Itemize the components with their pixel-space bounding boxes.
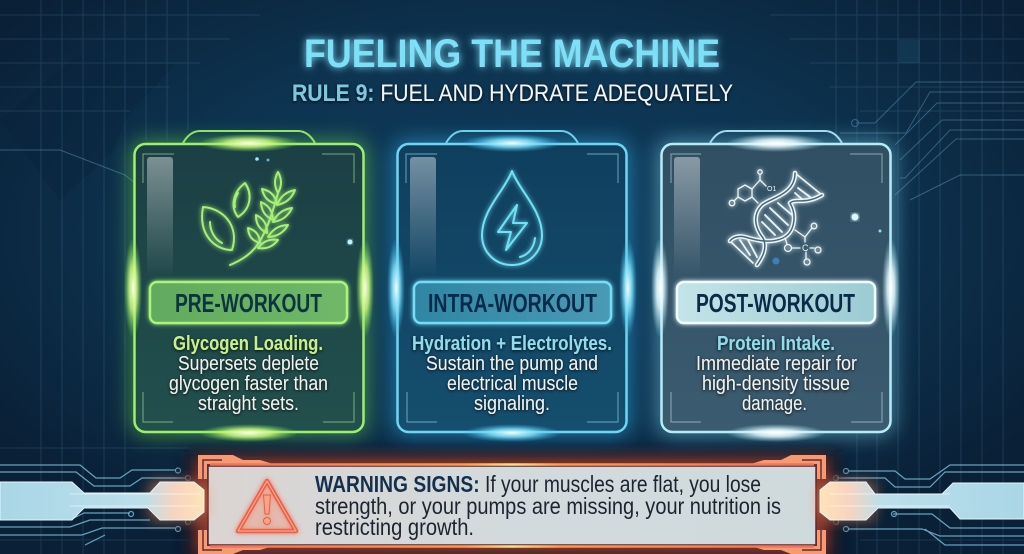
text: intra-workout description: Hydration + Electrolytes. [412,333,612,355]
label: post-workout: POST-WORKOUT [696,288,855,318]
label: pre-workout [150,282,347,323]
text: post-workout description: high-density tissue [702,373,850,395]
text: intra-workout description: electrical muscle [447,373,578,395]
right power connector [818,482,1024,520]
text: pre-workout description [169,333,328,415]
left circuit traces [0,465,190,545]
label: intra-workout [414,282,611,323]
molecule labels [767,186,809,253]
text: pre-workout description: Glycogen Loading. [173,333,323,355]
text: post-workout description [696,333,857,415]
warning text: strength, or your pumps are missing, your nutrition is [315,493,781,519]
text: post-workout description: Protein Intake. [717,333,835,355]
warning text: WARNING SIGNS: If your muscles are flat, you lose [315,471,761,497]
icon: leaves and wheat [202,172,295,265]
text: pre-workout description: glycogen faster than [169,373,328,395]
subtitle: RULE 9: FUEL AND HYDRATE ADEQUATELY [292,80,733,107]
label: post-workout [677,282,875,323]
molecule labels: C [802,243,809,253]
panel: pre-workout [124,131,374,442]
icon: DNA and molecules [729,170,822,265]
text: intra-workout description: signaling. [474,393,550,415]
right circuit traces [834,465,1024,545]
icon: warning triangle [238,481,296,531]
warning banner [185,452,839,554]
molecule labels: O1 [767,186,776,193]
text: pre-workout description: straight sets. [198,393,299,415]
text: intra-workout description: Sustain the pump and [426,353,598,375]
text: post-workout description: damage. [742,393,807,415]
icon: water drop with bolt [482,171,542,265]
text: pre-workout description: Supersets deplete [178,353,319,375]
label: intra-workout: INTRA-WORKOUT [428,288,597,318]
panel: intra-workout [387,131,637,442]
title: FUELING THE MACHINE [304,32,720,76]
label: pre-workout: PRE-WORKOUT [175,288,322,318]
left power connector [0,482,206,520]
warning text [315,471,781,540]
panel: post-workout [651,131,900,442]
text: post-workout description: Immediate repair for [696,353,857,375]
warning text: restricting growth. [315,514,474,540]
text: intra-workout description [412,333,612,415]
